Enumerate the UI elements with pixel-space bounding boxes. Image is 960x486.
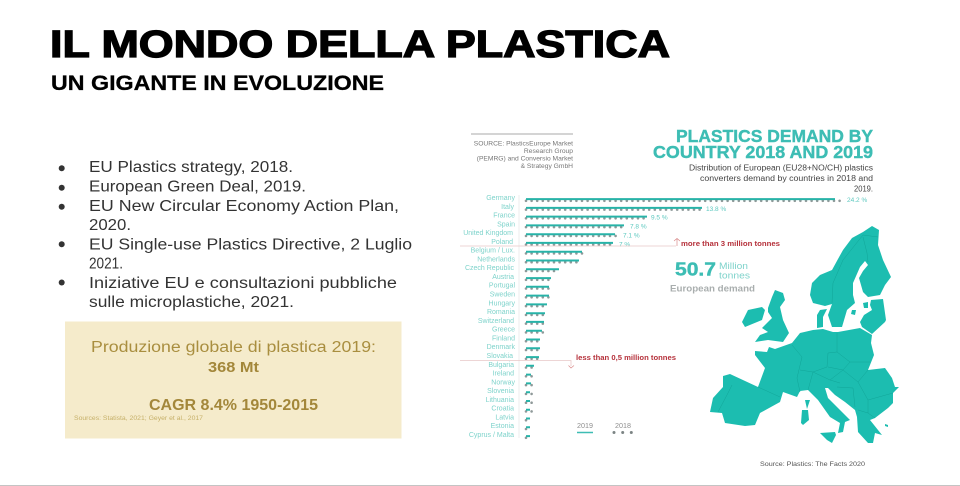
total demand figure: 50.7	[675, 260, 716, 280]
total demand figure: European demand	[670, 284, 755, 294]
bar value labels	[619, 197, 867, 248]
bullet list: EU policy milestones: European Green Deal, 2019.	[89, 178, 306, 196]
Estonian islands	[863, 302, 868, 308]
bullet list: EU policy milestones: Iniziative EU e consultazioni pubbliche	[89, 275, 397, 292]
Aegean island	[885, 424, 888, 427]
country labels	[463, 195, 515, 439]
country labels: Netherlands	[477, 256, 515, 263]
threshold: less than 0.5 million tonnes	[460, 355, 676, 368]
Corsica	[805, 400, 810, 409]
country labels: Portugal	[489, 283, 515, 290]
panel: plastics demand by country	[460, 126, 899, 468]
chart description	[689, 164, 873, 194]
total demand figure: tonnes	[719, 270, 750, 282]
panel: global production callout	[65, 322, 402, 438]
bullet list: EU policy milestones: sulle microplastiche, 2021.	[89, 294, 294, 311]
production label: Produzione globale di plastica 2019:	[91, 339, 376, 356]
panel sources: Sources: Statista, 2021; Geyer et al., 2017	[74, 416, 204, 422]
country labels: Lithuania	[486, 397, 514, 404]
total demand figure	[670, 260, 755, 294]
source note: Research Group	[524, 148, 573, 155]
source note	[471, 134, 573, 170]
continental Europe	[710, 328, 899, 443]
bullet list: EU policy milestones: 2021.	[89, 256, 123, 272]
country labels: Hungary	[489, 300, 515, 307]
bar value labels: 9.5 %	[651, 214, 668, 222]
Denmark	[817, 309, 827, 328]
bullet list: EU policy milestones: EU Single-use Plastics Directive, 2 Luglio	[89, 236, 412, 254]
country labels: United Kingdom	[463, 230, 513, 237]
production value: 368 Mt	[208, 360, 259, 376]
country labels: Estonia	[491, 423, 514, 430]
bar value labels: 24.2 %	[847, 197, 867, 204]
bar value labels: 7.1 %	[623, 232, 640, 240]
legend: 2018	[615, 423, 631, 430]
country labels: Italy	[501, 204, 514, 211]
chart description: Distribution of European (EU28+NO/CH) plastics	[689, 164, 873, 172]
bar chart: 2019 and 2018 demand	[519, 195, 841, 438]
Ireland	[742, 307, 765, 327]
source note: SOURCE: PlasticsEurope Market	[474, 140, 573, 148]
bullet list: EU policy milestones	[59, 159, 412, 311]
map source: Source: Plastics: The Facts 2020	[760, 461, 865, 468]
threshold: more than 3 million tonnes: more than 3 million tonnes	[681, 241, 780, 248]
country labels: France	[493, 212, 515, 220]
country labels: Latvia	[495, 414, 514, 421]
bullet list: EU policy milestones: EU New Circular Economy Action Plan,	[89, 198, 399, 215]
threshold: more than 3 million tonnes	[460, 238, 780, 248]
country labels: Switzerland	[478, 318, 514, 325]
source note: (PEMRG) and Conversio Market	[477, 156, 573, 162]
country labels: Croatia	[491, 406, 514, 413]
country labels: Ireland	[493, 370, 514, 378]
chart description: 2019.	[854, 184, 873, 194]
bar value labels: 13.8 %	[706, 206, 726, 213]
country labels: Denmark	[487, 344, 515, 351]
country labels: Belgium / Lux.	[471, 248, 515, 255]
subtitle: UN GIGANTE IN EVOLUZIONE	[51, 71, 384, 95]
legend: 2019	[577, 423, 593, 430]
threshold: less than 0.5 million tonnes: less than 0,5 million tonnes	[576, 355, 676, 362]
country labels: Germany	[486, 195, 515, 202]
country labels: Sweden	[490, 292, 515, 298]
growth rate: CAGR 8.4% 1950-2015	[149, 397, 318, 414]
Sicily	[820, 432, 836, 443]
Scandinavia	[810, 226, 891, 327]
country labels: Austria	[492, 274, 514, 281]
bar value labels: 7.8 %	[630, 224, 647, 230]
country labels: Slovenia	[487, 388, 514, 395]
country labels: Slovakia	[487, 353, 513, 360]
Baltic states	[860, 299, 886, 334]
chart heading: PLASTICS DEMAND BY	[676, 126, 873, 146]
country labels: Romania	[487, 309, 515, 316]
country borders	[718, 235, 893, 418]
country labels: Czech Republic	[465, 265, 514, 272]
map of Europe	[710, 226, 899, 443]
country labels: Cyprus / Malta	[469, 432, 514, 439]
title: IL MONDO DELLA PLASTICA	[50, 24, 670, 66]
chart description: converters demand by countries in 2018 and	[700, 174, 873, 183]
country labels: Greece	[492, 327, 515, 334]
country labels: Poland	[491, 239, 513, 246]
bullet list: EU policy milestones: 2020.	[89, 217, 131, 234]
country labels: Norway	[491, 379, 515, 386]
bullet list: EU policy milestones: EU Plastics strategy, 2018.	[89, 159, 293, 176]
country labels: Bulgaria	[488, 362, 514, 369]
legend	[577, 423, 633, 434]
source note: & Strategy GmbH	[521, 163, 573, 170]
total demand figure: Million	[719, 261, 748, 272]
Sardinia	[801, 410, 809, 425]
country labels: Spain	[497, 221, 515, 228]
bar value labels: 7 %	[619, 242, 630, 248]
chart heading: COUNTRY 2018 AND 2019	[653, 142, 873, 162]
Great Britain	[755, 290, 789, 342]
chart heading	[653, 126, 873, 162]
Gotland	[851, 310, 856, 315]
country labels: Finland	[492, 335, 515, 342]
